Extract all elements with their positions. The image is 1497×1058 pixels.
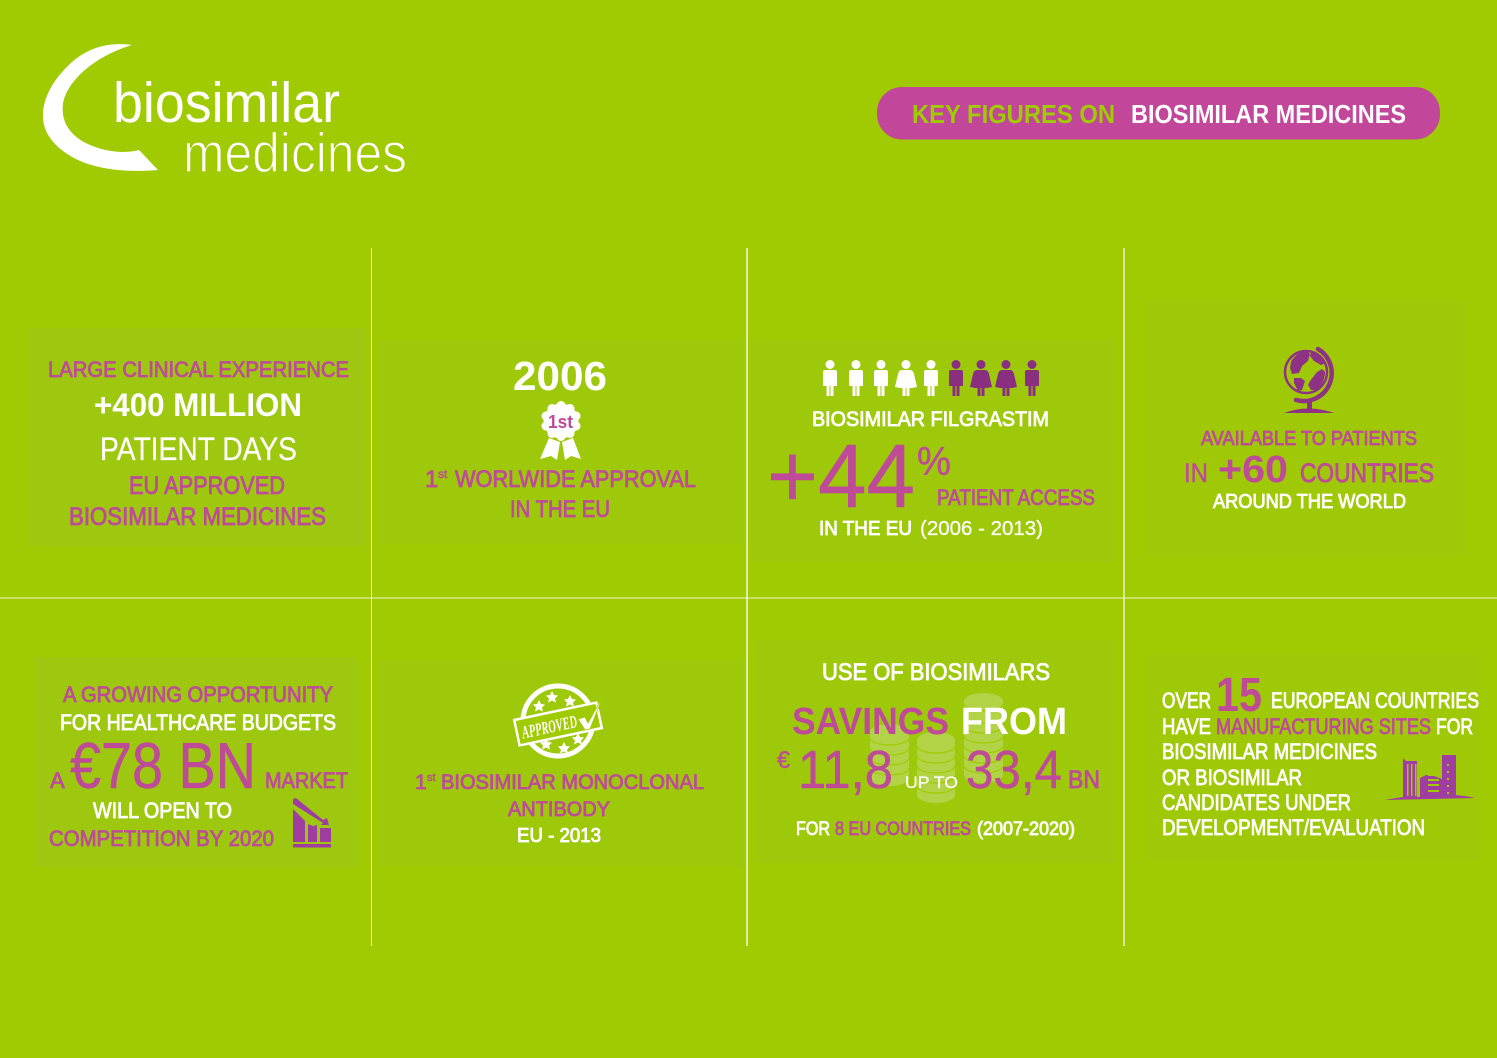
panel: manufacturing sites: FOR xyxy=(1436,714,1473,739)
panel: available in 60 countries: AVAILABLE TO PATIENTS xyxy=(1201,428,1417,450)
panel: savings: USE OF BIOSIMILARS xyxy=(822,659,1050,686)
panel: savings: FROM xyxy=(961,701,1067,743)
panel: clinical experience: BIOSIMILAR MEDICINES xyxy=(69,503,326,531)
panel: first approval 2006: st xyxy=(438,467,448,481)
panel: savings: BN xyxy=(1068,766,1100,794)
panel: manufacturing sites: OVER xyxy=(1162,688,1211,713)
figure: +60: +60 xyxy=(1218,449,1288,491)
panel: first monoclonal antibody xyxy=(415,686,704,847)
icon: row of people xyxy=(823,360,1039,396)
logo word medicines: medicines xyxy=(183,121,407,184)
year 2006: 2006 xyxy=(513,353,607,399)
panel: growing opportunity: MARKET xyxy=(265,768,348,793)
panel: first approval 2006 xyxy=(425,353,696,523)
icon: globe xyxy=(1284,349,1334,413)
panel: filgrastim patient access: % xyxy=(917,440,951,484)
figure: +400 million: +400 MILLION xyxy=(94,387,302,423)
panel: first monoclonal antibody: EU - 2013 xyxy=(517,825,601,847)
panel: manufacturing sites: HAVE xyxy=(1162,714,1211,739)
logo word biosimilar: biosimilar xyxy=(113,71,340,135)
panel: clinical experience: EU APPROVED xyxy=(129,472,285,500)
panel: first monoclonal antibody: 1 xyxy=(415,771,427,794)
icon: approved stamp xyxy=(514,686,603,756)
panel: savings: 8 EU COUNTRIES xyxy=(835,819,971,840)
panel: first approval 2006: IN THE EU xyxy=(510,496,610,523)
icon: factory buildings xyxy=(1385,755,1475,800)
panel: manufacturing sites: BIOSIMILAR MEDICINES xyxy=(1162,739,1377,764)
panel: growing opportunity: A xyxy=(50,768,65,793)
panel: available in 60 countries: COUNTRIES xyxy=(1300,458,1434,488)
panel: first monoclonal antibody: ANTIBODY xyxy=(508,798,610,821)
figure: 15: 15 xyxy=(1216,669,1262,722)
panel: filgrastim patient access xyxy=(767,360,1095,540)
icon: falling bar chart xyxy=(293,798,331,848)
panel: first monoclonal antibody: st xyxy=(427,772,436,784)
panel: filgrastim patient access: IN THE EU xyxy=(819,518,912,540)
icon: coin stacks xyxy=(870,693,1003,803)
panel: growing opportunity: FOR HEALTHCARE BUDGETS xyxy=(60,710,336,735)
panel: available in 60 countries xyxy=(1184,349,1434,513)
panel: growing opportunity: WILL OPEN TO xyxy=(93,798,232,823)
panel: savings xyxy=(777,659,1100,840)
title text green: KEY FIGURES ON xyxy=(912,99,1115,129)
panel: available in 60 countries: AROUND THE WORLD xyxy=(1213,491,1406,513)
panel: available in 60 countries: IN xyxy=(1184,458,1208,488)
icon: first place ribbon xyxy=(540,401,581,460)
icon: first place ribbon: 1st xyxy=(548,412,573,432)
panel: savings: SAVINGS xyxy=(792,701,949,743)
panel: manufacturing sites: DEVELOPMENT/EVALUATION xyxy=(1162,815,1425,840)
panel: first approval 2006: WORLWIDE APPROVAL xyxy=(455,466,696,493)
panel: filgrastim patient access: BIOSIMILAR FILGRASTIM xyxy=(812,408,1049,431)
panel: growing opportunity: COMPETITION BY 2020 xyxy=(49,826,274,851)
panel: savings: € xyxy=(777,747,791,774)
panel: manufacturing sites: CANDIDATES UNDER xyxy=(1162,790,1351,815)
figure: 33,4: 33,4 xyxy=(966,740,1062,800)
figure: 11,8: 11,8 xyxy=(798,740,893,800)
icon: approved stamp: APPROVED xyxy=(519,711,579,743)
panel: first approval 2006: 1 xyxy=(425,466,438,493)
panel: clinical experience xyxy=(48,357,349,531)
panel: manufacturing sites xyxy=(1162,669,1479,840)
title text white: BIOSIMILAR MEDICINES xyxy=(1131,99,1406,129)
title pill xyxy=(877,87,1440,140)
panel: filgrastim patient access: PATIENT ACCESS xyxy=(937,485,1095,510)
panel: filgrastim patient access: (2006 - 2013) xyxy=(920,518,1043,540)
panel: clinical experience: LARGE CLINICAL EXPERIENCE xyxy=(48,357,349,382)
figure: +44%: +44 xyxy=(767,427,915,527)
panel: growing opportunity: A GROWING OPPORTUNITY xyxy=(63,682,333,707)
panel: manufacturing sites: MANUFACTURING SITES xyxy=(1216,714,1431,739)
panel: growing opportunity xyxy=(49,682,348,851)
panel: first monoclonal antibody: BIOSIMILAR MONOCLONAL xyxy=(441,771,704,794)
panel: clinical experience: PATIENT DAYS xyxy=(100,431,297,467)
panel: manufacturing sites: OR BIOSIMILAR xyxy=(1162,765,1302,790)
figure: 78 BN market: €78 BN xyxy=(70,729,256,802)
panel: savings: (2007-2020) xyxy=(977,819,1075,840)
panel: savings: FOR xyxy=(796,819,830,840)
logo crescent xyxy=(43,44,158,171)
logo: biosimilar medicines xyxy=(43,44,407,184)
panel: savings: UP TO xyxy=(905,773,958,792)
